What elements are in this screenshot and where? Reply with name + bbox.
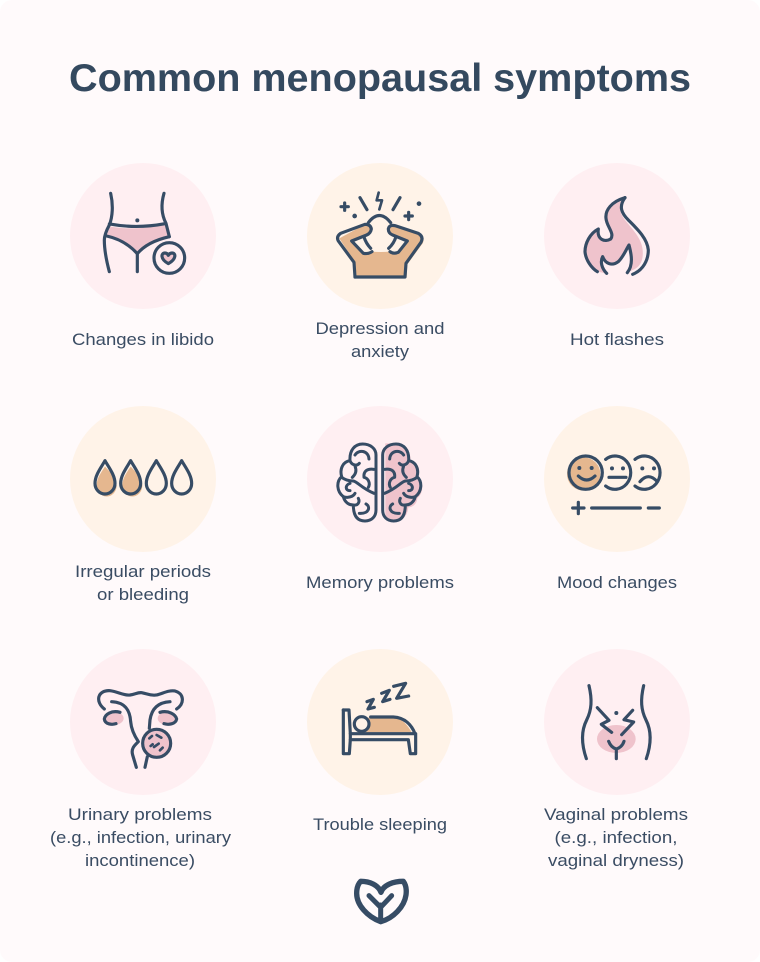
icon: person sleeping in bed [343,683,416,754]
icon: four drops [95,461,192,497]
label: Urinary problems [68,805,212,824]
panel: urinary problems [50,649,232,870]
icon: waist with heart [104,193,185,273]
label: Depression and [316,319,444,338]
label: Trouble sleeping [313,815,447,834]
label: or bleeding [97,585,189,604]
icon: uterus with bacteria [99,691,182,767]
panel: hot flashes [544,163,690,349]
icon: pelvis with pain bolts [582,686,650,759]
label: vaginal dryness) [548,851,684,870]
icon: three faces with scale [567,456,660,514]
panel: changes in libido [70,163,216,349]
label: incontinence) [85,851,195,870]
label: (e.g., infection, [554,828,678,847]
label: Mood changes [557,573,677,592]
title: Common menopausal symptoms [69,57,691,100]
panel: vaginal problems [544,649,690,870]
panel: trouble sleeping [307,649,453,834]
label: anxiety [351,342,410,361]
icon: flame [585,198,648,274]
label: Hot flashes [570,330,664,349]
panel: depression and anxiety [307,163,453,361]
label [316,319,444,361]
panel: mood changes [544,406,690,592]
label [75,562,211,604]
label: Memory problems [306,573,454,592]
label [544,805,688,870]
icon: brain [338,443,422,521]
label: Irregular periods [75,562,211,581]
label [50,805,232,870]
label: Changes in libido [72,330,214,349]
label: Vaginal problems [544,805,688,824]
icon: leaf heart logo [357,881,406,922]
panel: memory problems [306,406,454,592]
panel: irregular periods or bleeding [70,406,216,604]
label: (e.g., infection, urinary [50,828,232,847]
icon: head in hands [338,193,424,278]
